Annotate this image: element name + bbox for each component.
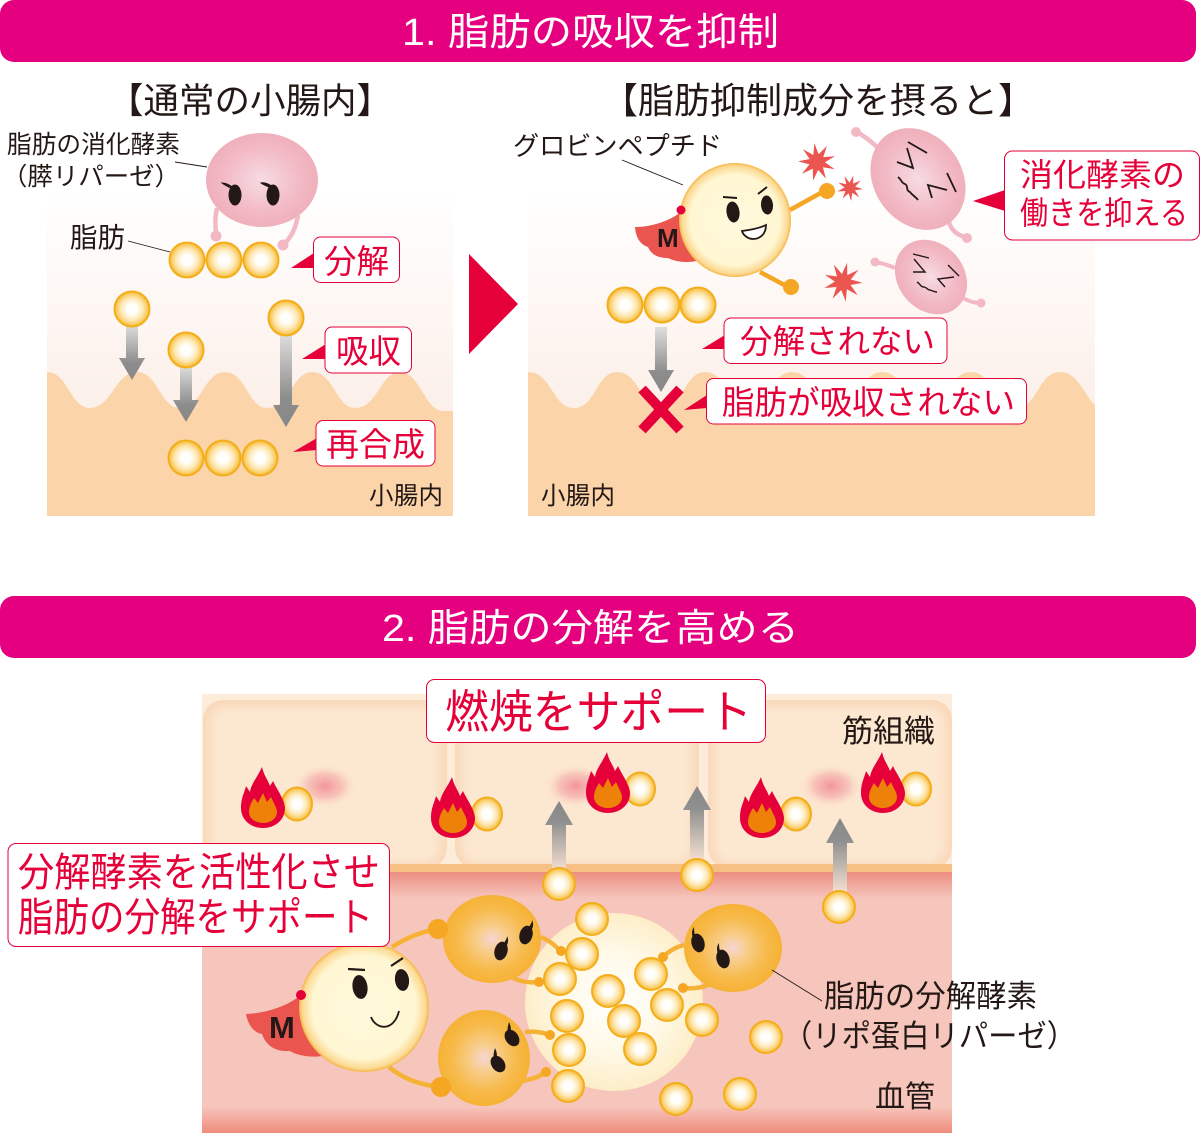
label: digestive enzyme: 脂肪の消化酵素 <box>7 131 180 159</box>
label: blood vessel: 血管 <box>875 1081 935 1114</box>
flame and fat 1 <box>241 767 312 828</box>
label: fat <box>70 222 170 253</box>
label: fat-degrading enzyme <box>772 970 1076 1054</box>
vessel wall <box>202 864 952 873</box>
callout: suppress digestive enzyme <box>973 151 1200 240</box>
fat molecules: not broken down <box>608 288 716 322</box>
arrow up with fat 2 <box>681 786 713 891</box>
label: fat-degrading enzyme: 脂肪の分解酵素 <box>824 979 1037 1014</box>
callout: break down <box>291 237 400 282</box>
heading: with fat suppressing ingredient: 【脂肪抑制成分を摂ると】 <box>602 80 1034 121</box>
label: globin peptide <box>513 131 722 185</box>
callout: resynthesis: 再合成 <box>326 426 425 463</box>
arrow with fat 2 <box>168 332 204 422</box>
banner: section 1: 1. 脂肪の吸収を抑制 <box>402 12 779 54</box>
glow marks <box>293 764 863 808</box>
intestine tissue <box>47 372 453 516</box>
character: lipoprotein lipase 3 <box>431 1010 555 1106</box>
fat molecules in blood <box>544 903 782 1115</box>
blood vessel <box>202 872 952 1133</box>
fat molecules: top three <box>170 242 278 278</box>
fat molecules: resynthesized <box>168 440 278 476</box>
callout: activate enzymes: 分解酵素を活性化させ <box>18 851 380 895</box>
callout: activate enzymes <box>8 844 390 946</box>
character: pink digestive enzyme <box>206 133 318 250</box>
callout: suppress digestive enzyme: 消化酵素の <box>1020 157 1185 193</box>
heading: normal small intestine: 【通常の小腸内】 <box>108 81 392 121</box>
callout: support burning: 燃焼をサポート <box>445 686 752 738</box>
flame and fat 3 <box>586 752 655 813</box>
label: small intestine: 小腸内 <box>541 482 615 510</box>
callout: activate enzymes: 脂肪の分解をサポート <box>18 896 373 940</box>
character: pink enzyme large <box>851 110 985 248</box>
muscle cells <box>203 700 952 868</box>
label: fat-degrading enzyme: （リポ蛋白リパーゼ） <box>783 1019 1076 1054</box>
callout: not broken down <box>702 318 947 364</box>
arrow with fat 1 <box>114 292 150 380</box>
enzyme hands and arms <box>389 929 710 1087</box>
panel: intestine with ingredient <box>528 190 1095 516</box>
flame and fat 2 <box>431 777 502 838</box>
callout: resynthesis <box>293 420 435 466</box>
arrow: before to after <box>469 254 518 354</box>
character: globin peptide hero large: M <box>269 1010 295 1045</box>
label: fat: 脂肪 <box>70 222 125 253</box>
arrow up with fat 1 <box>543 801 575 900</box>
banner: section 1 <box>0 0 1196 62</box>
big fat droplet <box>525 913 703 1091</box>
arrow with fat 3 <box>268 300 304 427</box>
character: lipoprotein lipase 2 <box>658 904 782 993</box>
mark: cross <box>642 389 680 430</box>
label: digestive enzyme: （膵リパーゼ） <box>2 163 180 191</box>
label: globin peptide: グロビンペプチド <box>513 131 722 161</box>
character: lipoprotein lipase 1 <box>428 895 566 987</box>
flame and fat 5 <box>861 752 931 813</box>
callout: absorption: 吸収 <box>336 333 401 370</box>
arrow: blocked <box>648 327 674 392</box>
label: small intestine: 小腸内 <box>369 482 443 510</box>
character: globin peptide hero: M <box>657 223 679 253</box>
arrow up with fat 3 <box>823 818 855 923</box>
bursts <box>796 141 866 304</box>
callout: break down: 分解 <box>324 243 389 280</box>
callout: absorption <box>302 327 412 373</box>
banner: section 2: 2. 脂肪の分解を高める <box>382 608 799 650</box>
label: digestive enzyme <box>2 131 207 191</box>
panel: normal intestine <box>47 190 453 516</box>
callout: fat not absorbed: 脂肪が吸収されない <box>722 384 1015 421</box>
panel: muscle and blood diagram <box>202 694 952 1133</box>
intestine tissue <box>528 372 1095 516</box>
flame and fat 4 <box>740 777 811 838</box>
character: globin peptide hero <box>635 163 835 295</box>
label: muscle tissue: 筋組織 <box>842 714 935 749</box>
callout: not broken down: 分解されない <box>740 323 935 360</box>
character: globin peptide hero large <box>246 942 429 1072</box>
character: pink enzyme small <box>870 225 986 329</box>
banner: section 2 <box>0 596 1196 658</box>
